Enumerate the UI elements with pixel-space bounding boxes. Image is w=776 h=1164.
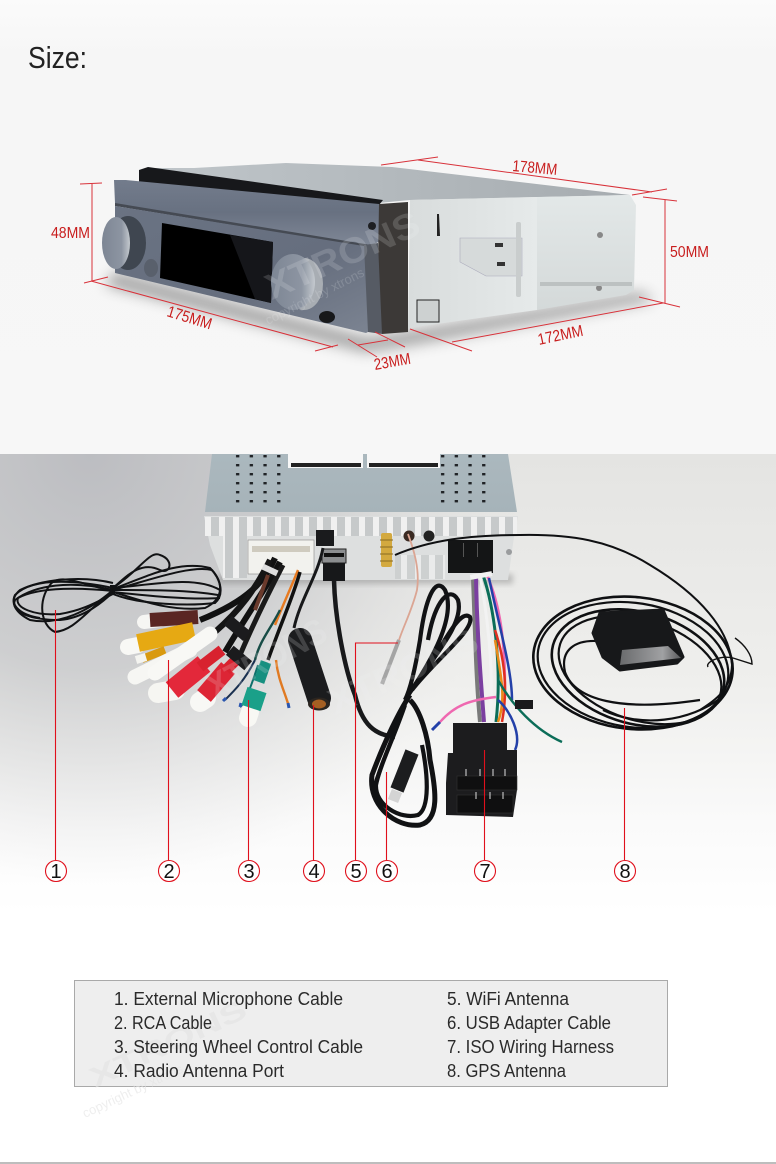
legend watermark	[80, 993, 252, 1121]
label 178MM: 178MM	[512, 158, 558, 179]
screw	[506, 549, 512, 555]
connector slots	[457, 769, 517, 813]
3 steering wheel control cable	[223, 570, 300, 718]
legend left column: 2. RCA Cable	[114, 1013, 212, 1033]
callout 5	[346, 860, 366, 883]
brown plug	[144, 617, 198, 622]
USB socket	[322, 549, 346, 581]
legend right column: 7. ISO Wiring Harness	[447, 1037, 614, 1057]
right knob	[271, 254, 323, 310]
white plug rear	[135, 650, 190, 677]
cable tie	[470, 571, 492, 580]
legend left column: 3. Steering Wheel Control Cable	[114, 1037, 363, 1057]
callout 2	[158, 860, 180, 883]
section background: cables photo	[0, 454, 776, 964]
dimension: 48MM	[80, 183, 102, 281]
callout 8: 8	[619, 861, 631, 883]
screen	[160, 223, 273, 303]
dimension: 50MM	[639, 197, 680, 307]
label 175MM: 175MM	[165, 304, 214, 333]
6 USB adapter cable	[372, 586, 470, 825]
wire loom	[432, 575, 562, 750]
metal side rear	[537, 195, 636, 310]
red plug left	[158, 650, 222, 693]
dimension labels	[51, 158, 709, 374]
1 microphone cable	[14, 554, 221, 632]
legend panel	[74, 980, 668, 1121]
dimension lines	[80, 157, 680, 357]
callout 4: 4	[308, 861, 320, 883]
unit shadow	[105, 272, 655, 352]
unit top cover	[148, 163, 630, 203]
USB plug	[393, 752, 412, 801]
legend watermark: copyright by xtrons	[80, 1061, 186, 1121]
connector housing	[446, 723, 517, 817]
legend left column	[114, 989, 363, 1081]
dark gap behind panels	[115, 201, 372, 248]
black top edge	[139, 167, 383, 205]
5 WiFi antenna	[382, 534, 418, 684]
callout 1: 1	[50, 861, 62, 883]
callout 3	[238, 860, 260, 883]
legend left column: 4. Radio Antenna Port	[114, 1061, 284, 1081]
white harness socket	[248, 540, 314, 574]
yellow plug	[128, 631, 194, 660]
vent dots left	[233, 454, 289, 508]
top plate	[205, 454, 517, 512]
black side strip	[377, 202, 408, 334]
callout 4	[304, 860, 324, 883]
label 50MM: 50MM	[670, 244, 709, 261]
legend left column: 1. External Microphone Cable	[114, 989, 343, 1009]
left knob	[102, 216, 158, 277]
callout leader lines	[56, 610, 624, 860]
callout 2: 2	[163, 861, 175, 883]
front faceplate	[115, 206, 372, 333]
vent dots right	[438, 454, 494, 508]
small connector	[515, 700, 533, 709]
numbered callouts	[46, 860, 636, 883]
jack	[368, 222, 376, 230]
7 ISO wiring harness	[432, 571, 562, 817]
watermark: cables photo	[200, 610, 484, 722]
callout 5: 5	[350, 861, 362, 883]
callout 7: 7	[479, 861, 491, 883]
black port	[316, 530, 334, 546]
heat-shrink labels	[224, 616, 252, 670]
callout 1	[46, 860, 66, 883]
watermark: cables photo: XTRONS	[200, 610, 334, 707]
flip panel	[114, 180, 379, 245]
short black USB lead	[334, 580, 395, 737]
watermark: size photo: XTRONS	[259, 203, 426, 307]
GPS puck	[593, 610, 683, 670]
callout 3: 3	[243, 861, 255, 883]
legend right column: 8. GPS Antenna	[447, 1061, 567, 1081]
round ports	[404, 530, 434, 542]
legend right column	[447, 989, 614, 1081]
dimension: 175MM	[84, 277, 338, 351]
8 GPS antenna	[395, 535, 752, 745]
head unit dimension photo	[102, 163, 655, 352]
rear view of head unit	[204, 454, 518, 584]
2 RCA cables and plugs	[128, 558, 283, 702]
watermark: size photo: copyright by xtrons	[263, 265, 367, 328]
gold SMA connector	[380, 533, 393, 567]
legend right column: 5. WiFi Antenna	[447, 989, 570, 1009]
label 48MM: 48MM	[51, 225, 90, 242]
callout 7	[474, 860, 496, 883]
legend right column: 6. USB Adapter Cable	[447, 1013, 611, 1033]
black cable bundle	[200, 558, 275, 620]
section background: size	[0, 0, 776, 454]
green plug	[248, 662, 266, 718]
4 radio antenna port	[294, 548, 330, 710]
ISO socket	[448, 540, 493, 573]
side details	[417, 214, 632, 322]
finned back panel	[204, 516, 518, 580]
callout 6: 6	[381, 861, 393, 883]
small button	[319, 311, 335, 323]
legend watermark: XTRONS	[84, 993, 252, 1093]
long GPS wire	[395, 535, 732, 710]
dimension: 178MM	[381, 157, 667, 195]
dimension: 23MM	[348, 332, 405, 357]
GPS wire tail	[708, 638, 752, 667]
metal side front	[408, 197, 537, 328]
white plug front	[155, 634, 210, 673]
spec labels	[288, 454, 440, 468]
dimension: 172MM	[410, 303, 663, 351]
shadow	[218, 574, 513, 584]
label 172MM: 172MM	[536, 323, 585, 349]
label 23MM: 23MM	[373, 351, 412, 374]
watermark: cables photo: XTRONS	[322, 620, 484, 722]
title: Size:	[28, 40, 87, 75]
callout 8	[614, 860, 636, 883]
callout 6	[376, 860, 398, 883]
red plug right	[200, 658, 238, 702]
